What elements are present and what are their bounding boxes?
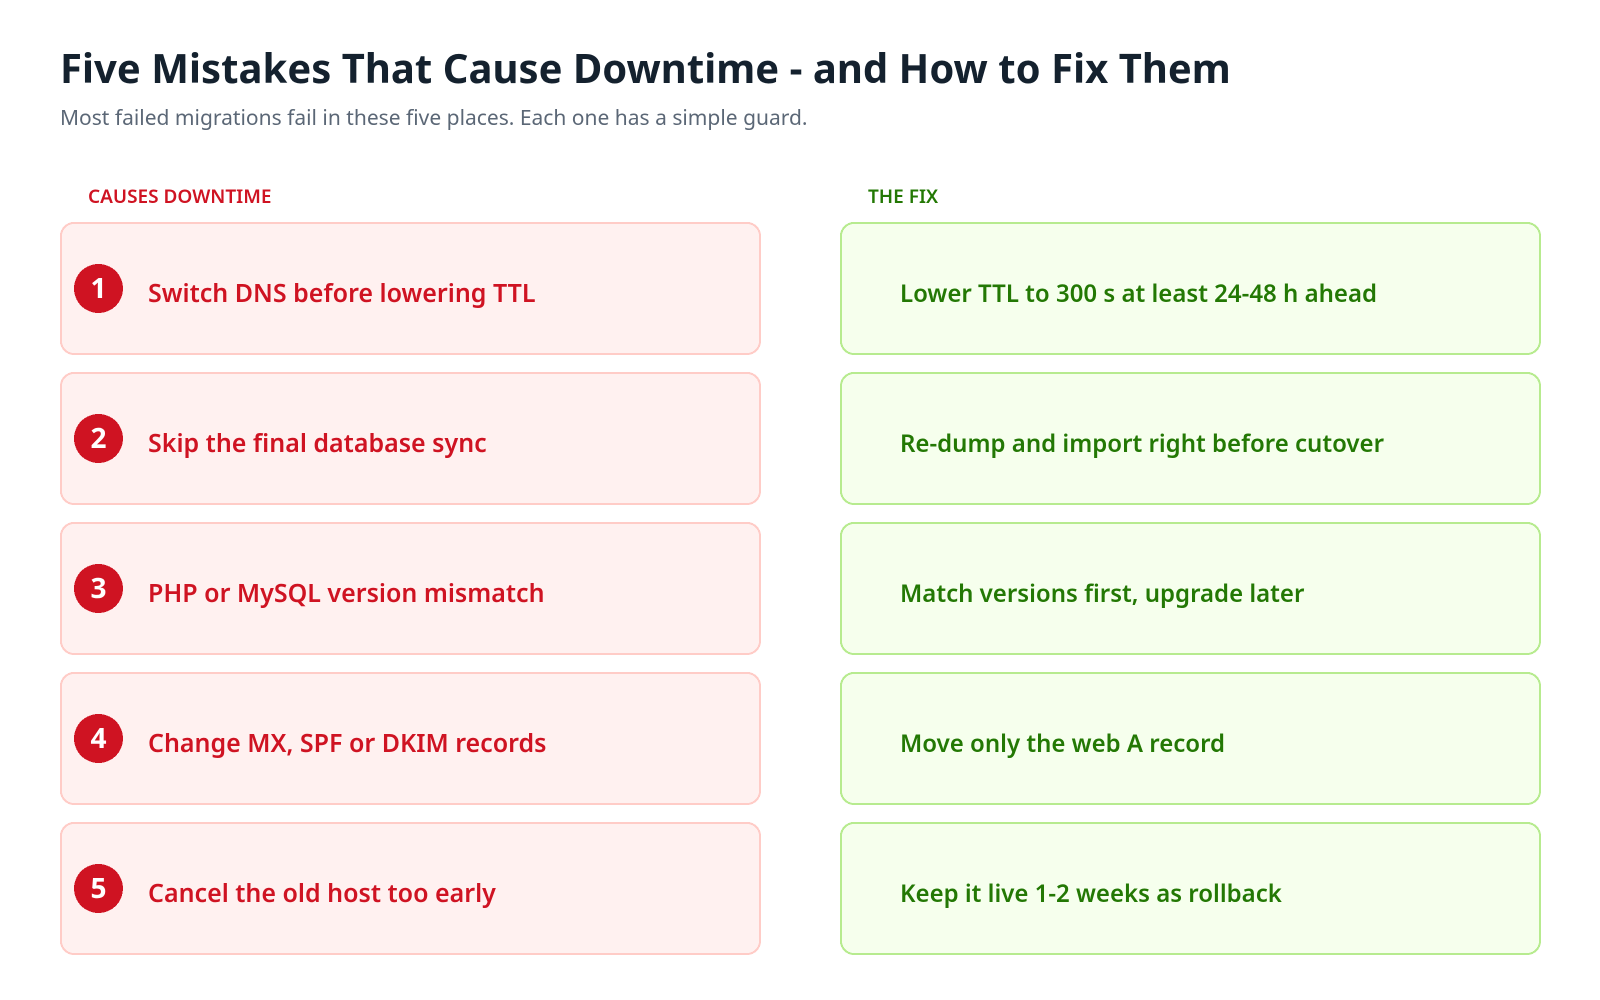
panel: mistake 4	[61, 673, 760, 804]
panel: fix 2: Re-dump and import right before cutover	[900, 427, 1385, 460]
heading: causes downtime: CAUSES DOWNTIME	[88, 183, 271, 209]
panel: fix 3: Match versions first, upgrade later	[900, 577, 1305, 610]
panel: mistake 2: Skip the final database sync	[148, 426, 487, 460]
panel: fix 4: Move only the web A record	[900, 727, 1225, 760]
panel: mistake 2	[61, 373, 760, 504]
panel: mistake 3: 3	[90, 569, 107, 607]
panel: fix 1: Lower TTL to 300 s at least 24-48 h ahead	[900, 277, 1377, 310]
panel: mistake 5: 5	[90, 869, 107, 907]
panel: fix 3	[841, 523, 1540, 654]
panel: mistake 5	[61, 823, 760, 954]
panel: mistake 1: 1	[90, 269, 107, 307]
panel: mistake 1	[61, 223, 760, 354]
title: Five Mistakes That Cause Downtime - and How to Fix Them	[60, 40, 1231, 95]
panel: fix 5	[841, 823, 1540, 954]
panel: mistake 1: Switch DNS before lowering TTL	[148, 276, 536, 310]
panel: mistake 3	[61, 523, 760, 654]
panel: fix 5: Keep it live 1-2 weeks as rollback	[900, 877, 1283, 910]
panel: mistake 3: PHP or MySQL version mismatch	[148, 576, 545, 610]
panel: mistake 5: Cancel the old host too early	[148, 876, 496, 910]
panel: mistake 2: 2	[90, 419, 107, 457]
panel: mistake 4: 4	[90, 719, 107, 757]
heading: the fix: THE FIX	[868, 183, 939, 209]
panel: fix 2	[841, 373, 1540, 504]
panel: fix 1	[841, 223, 1540, 354]
panel: mistake 4: Change MX, SPF or DKIM records	[148, 726, 546, 760]
panel: fix 4	[841, 673, 1540, 804]
subtitle: Most failed migrations fail in these five places. Each one has a simple guard.	[60, 104, 808, 132]
